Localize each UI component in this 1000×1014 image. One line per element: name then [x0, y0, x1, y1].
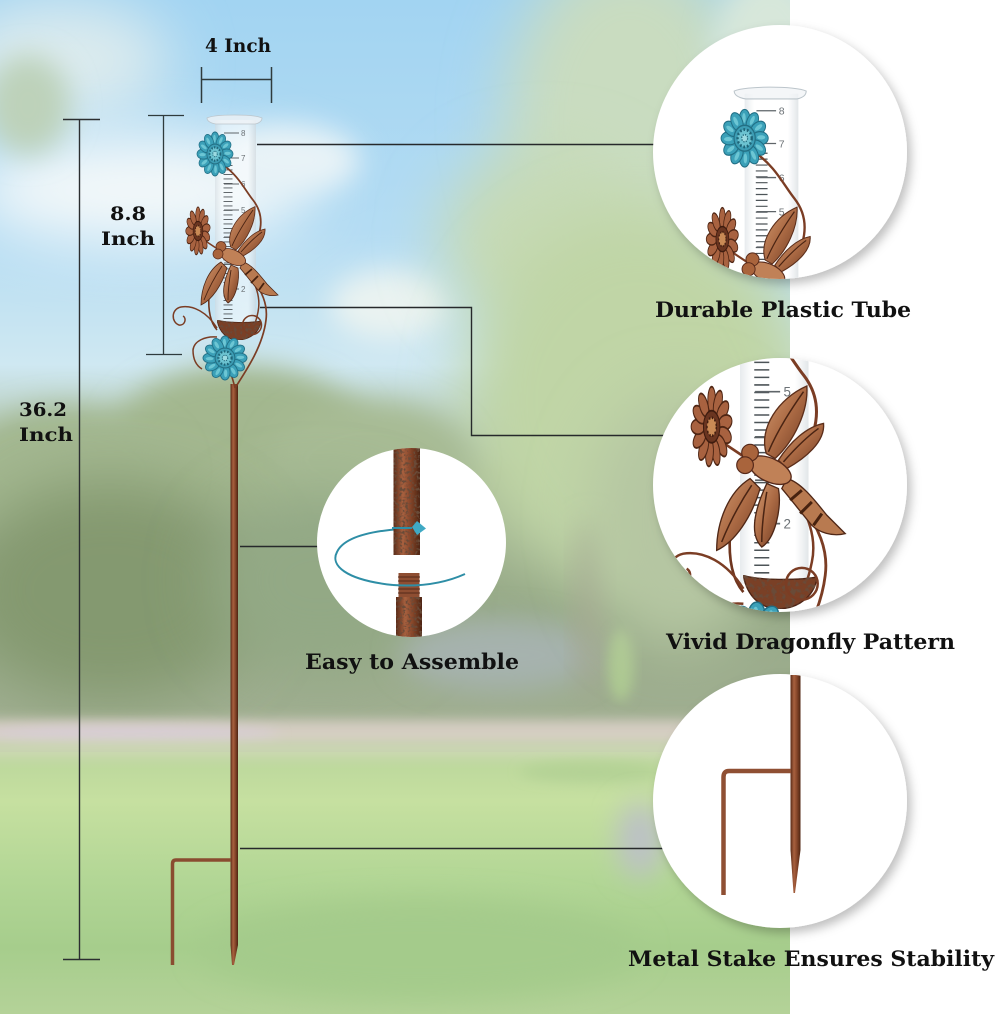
caption: easy to assemble: Easy to Assemble [305, 649, 519, 674]
callout circle: metal stake [653, 674, 907, 928]
leader lines to the callouts [240, 144, 665, 848]
caption: metal stake ensures stability: Metal Stake Ensures Stability [628, 946, 995, 971]
rotation arrow head [412, 521, 426, 535]
lower pipe [396, 597, 422, 637]
caption: vivid dragonfly pattern: Vivid Dragonfly Pattern [665, 629, 955, 654]
callout circle: plastic tube [652, 25, 916, 289]
threaded joint [398, 573, 420, 598]
callout circle: assembly [317, 445, 506, 642]
stake pole [230, 384, 238, 965]
upper pipe [394, 445, 420, 555]
white panel on the right [790, 0, 1000, 1014]
dimension: 8.8 inch height [101, 115, 184, 354]
rotation arrow back arc [334, 528, 394, 586]
caption: durable plastic tube: Durable Plastic Tube [655, 297, 911, 322]
stake side prong [172, 860, 231, 965]
rain gauge stake [172, 115, 278, 965]
dimension: 4 inch width [201, 35, 272, 103]
dimension: 36.2 inch height: 36.2 [19, 399, 67, 421]
callout circle: dragonfly [652, 358, 916, 622]
dimension: 36.2 inch height: Inch [19, 424, 73, 446]
dimension: 36.2 inch height [19, 119, 100, 960]
dimension: 8.8 inch height: 8.8 [110, 203, 146, 225]
dimension: 8.8 inch height: Inch [101, 228, 155, 250]
rain gauge tube with dragonfly [173, 115, 278, 388]
dimension: 4 inch width: 4 Inch [205, 35, 271, 57]
